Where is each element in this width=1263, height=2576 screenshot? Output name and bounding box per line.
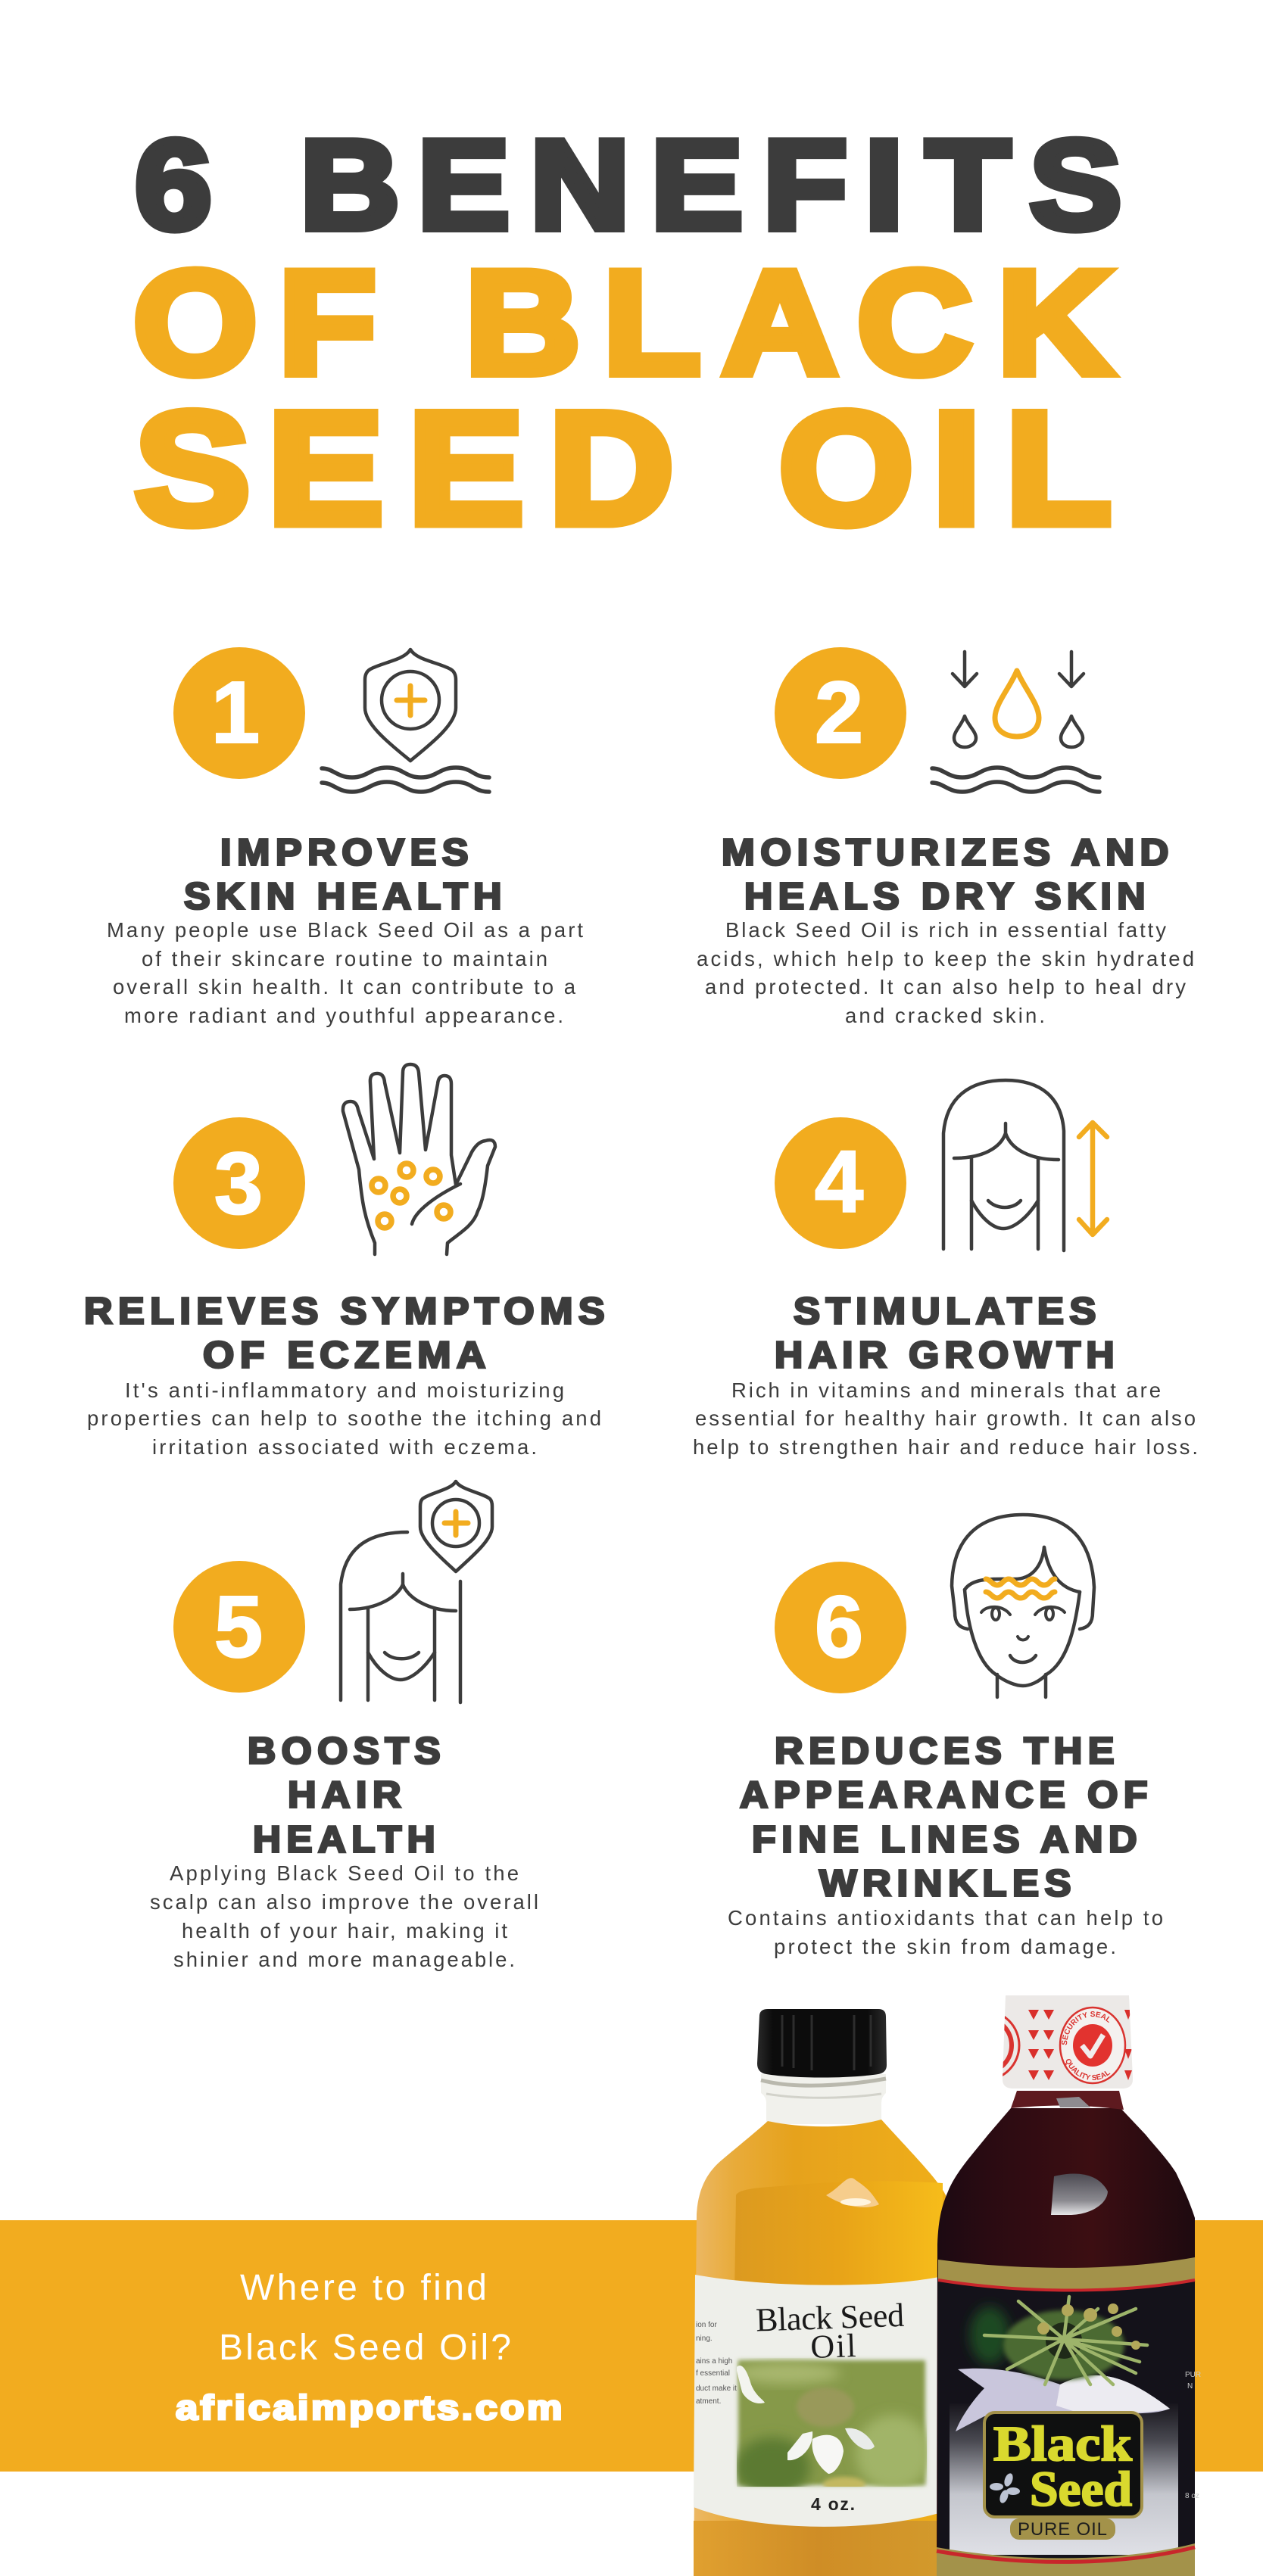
- black label: [938, 2280, 1195, 2559]
- heading: [740, 1730, 1153, 1905]
- body text: health of your hair, making it: [182, 1919, 507, 1942]
- body text: [728, 1906, 1163, 1958]
- bottle glass neck: [761, 2074, 886, 2124]
- heading: [775, 1291, 1120, 1376]
- body text: scalp can also improve the overall: [150, 1890, 538, 1914]
- icon: hair with shield: [341, 1481, 492, 1702]
- number badge 6: [775, 1562, 906, 1693]
- security seal cap: QUALITY SEAL: [1065, 2059, 1110, 2080]
- heading: REDUCES THE: [775, 1730, 1120, 1771]
- panel: benefit 6: [728, 1515, 1163, 1958]
- label side text: ning.: [696, 2335, 713, 2343]
- heading: OF ECZEMA: [203, 1335, 491, 1376]
- label side text: f essential: [696, 2369, 730, 2378]
- title: OF BLACK: [133, 241, 1112, 404]
- heading: HEALS DRY SKIN: [744, 877, 1151, 917]
- title: SEED OIL: [135, 380, 1111, 557]
- neck foil: [1011, 2091, 1124, 2110]
- side label text: PUR: [1185, 2371, 1201, 2379]
- body text: shinier and more manageable.: [173, 1948, 515, 1971]
- body text: acids, which help to keep the skin hydrated: [697, 947, 1194, 970]
- label side text: atment.: [696, 2397, 721, 2406]
- label title: Oil: [809, 2327, 856, 2366]
- security seal cap: [1003, 1995, 1133, 2089]
- heading: [184, 833, 507, 917]
- pure oil tag: PURE OIL: [1018, 2519, 1107, 2540]
- plaque flower icon: [990, 2472, 1020, 2504]
- body text: [693, 1378, 1198, 1459]
- label title: Black Seed: [755, 2297, 905, 2339]
- body text: of their skincare routine to maintain: [142, 947, 547, 970]
- body text: [697, 918, 1194, 1027]
- heading: [84, 1291, 610, 1376]
- label flower photo: [734, 2360, 931, 2498]
- side label text: N: [1187, 2382, 1193, 2391]
- label side text: ains a high: [696, 2357, 732, 2366]
- heading: [722, 833, 1174, 917]
- number badge 1: 1: [211, 663, 260, 762]
- icon: hand with eczema spots: [343, 1064, 495, 1254]
- footer call to action: africaimports.com: [176, 2388, 565, 2427]
- icon: long hair with length arrow: [943, 1080, 1107, 1251]
- body text: protect the skin from damage.: [774, 1935, 1116, 1958]
- icon: face with forehead wrinkles: [952, 1515, 1094, 1697]
- title: 6 BENEFITS: [135, 114, 1121, 256]
- body text: [107, 918, 583, 1027]
- black seed plaque: Seed: [1030, 2462, 1132, 2517]
- body text: Contains antioxidants that can help to: [728, 1906, 1163, 1930]
- panel: benefit 5: [150, 1481, 538, 1971]
- seal text: SECURITY SEAL: [1062, 2011, 1110, 2045]
- nigella flower: [956, 2297, 1170, 2431]
- bottle body: [937, 2108, 1195, 2576]
- heading: HEALTH: [253, 1820, 441, 1861]
- label side text: ion for: [696, 2321, 717, 2329]
- number badge 1: [173, 647, 305, 779]
- number badge 3: 3: [214, 1134, 263, 1232]
- bottle: dark black seed pure oil: [936, 1995, 1201, 2576]
- label weight: 4 oz.: [811, 2494, 855, 2514]
- bottle label: [694, 2275, 939, 2527]
- body text: It's anti-inflammatory and moisturizing: [125, 1378, 564, 1402]
- heading: HAIR GROWTH: [775, 1335, 1120, 1376]
- body text: and cracked skin.: [845, 1004, 1045, 1027]
- number badge 5: 5: [214, 1578, 263, 1676]
- body text: properties can help to soothe the itching and: [87, 1406, 601, 1430]
- title: [133, 114, 1121, 557]
- body text: [87, 1378, 601, 1459]
- label side text: [696, 2321, 737, 2406]
- number badge 4: [775, 1117, 906, 1249]
- heading: STIMULATES: [794, 1291, 1102, 1332]
- body text: irritation associated with eczema.: [152, 1435, 537, 1459]
- body text: [150, 1861, 538, 1971]
- side label text: 8 oz: [1185, 2492, 1199, 2500]
- number badge 3: [173, 1117, 305, 1249]
- heading: FINE LINES AND: [752, 1820, 1143, 1861]
- heading: WRINKLES: [819, 1864, 1077, 1905]
- panel: benefit 3: [84, 1064, 610, 1459]
- footer band: [0, 2220, 1263, 2472]
- heading: BOOSTS: [248, 1730, 446, 1771]
- number badge 2: [775, 647, 906, 779]
- body text: help to strengthen hair and reduce hair loss.: [693, 1435, 1198, 1459]
- footer call to action: Black Seed Oil?: [219, 2328, 511, 2368]
- heading: SKIN HEALTH: [184, 877, 507, 917]
- black seed plaque: Black: [993, 2416, 1132, 2472]
- number badge 5: [173, 1561, 305, 1693]
- heading: APPEARANCE OF: [740, 1774, 1153, 1815]
- icon: shield over waves: [322, 649, 489, 792]
- heading: RELIEVES SYMPTOMS: [84, 1291, 610, 1332]
- number badge 6: 6: [815, 1578, 863, 1676]
- bottle: amber black seed oil: [694, 2009, 946, 2576]
- body text: more radiant and youthful appearance.: [124, 1004, 563, 1027]
- body text: essential for healthy hair growth. It can also: [695, 1406, 1196, 1430]
- number badge 2: 2: [815, 663, 863, 762]
- body text: Black Seed Oil is rich in essential fatty: [725, 918, 1166, 942]
- footer call to action: Where to find: [240, 2268, 487, 2308]
- heading: IMPROVES: [220, 833, 474, 874]
- lower gold band: [937, 2543, 1195, 2576]
- body text: Applying Black Seed Oil to the: [170, 1861, 519, 1885]
- black seed plaque: [984, 2412, 1142, 2517]
- heading: HAIR: [288, 1774, 407, 1815]
- body text: and protected. It can also help to heal dry: [705, 975, 1186, 998]
- body text: overall skin health. It can contribute to a: [113, 975, 576, 998]
- glass highlight: [1051, 2174, 1108, 2215]
- bottle highlight: [826, 2178, 879, 2207]
- label title: [755, 2297, 906, 2368]
- heading: [248, 1730, 446, 1861]
- side label text: [1185, 2371, 1201, 2500]
- panel: benefit 1: [107, 647, 583, 1027]
- upper gold band: [938, 2257, 1195, 2291]
- footer call to action: [176, 2268, 565, 2427]
- label lower fade: [950, 2403, 1178, 2555]
- icon: drops over waves: [932, 652, 1099, 792]
- heading: MOISTURIZES AND: [722, 833, 1174, 874]
- body text: Rich in vitamins and minerals that are: [731, 1378, 1161, 1402]
- label side text: duct make it: [696, 2384, 737, 2393]
- panel: benefit 4: [693, 1080, 1198, 1459]
- body text: Many people use Black Seed Oil as a part: [107, 918, 583, 942]
- bottle body: [694, 2120, 946, 2576]
- bottle cap: [757, 2009, 887, 2077]
- panel: benefit 2: [697, 647, 1194, 1027]
- number badge 4: 4: [815, 1132, 863, 1231]
